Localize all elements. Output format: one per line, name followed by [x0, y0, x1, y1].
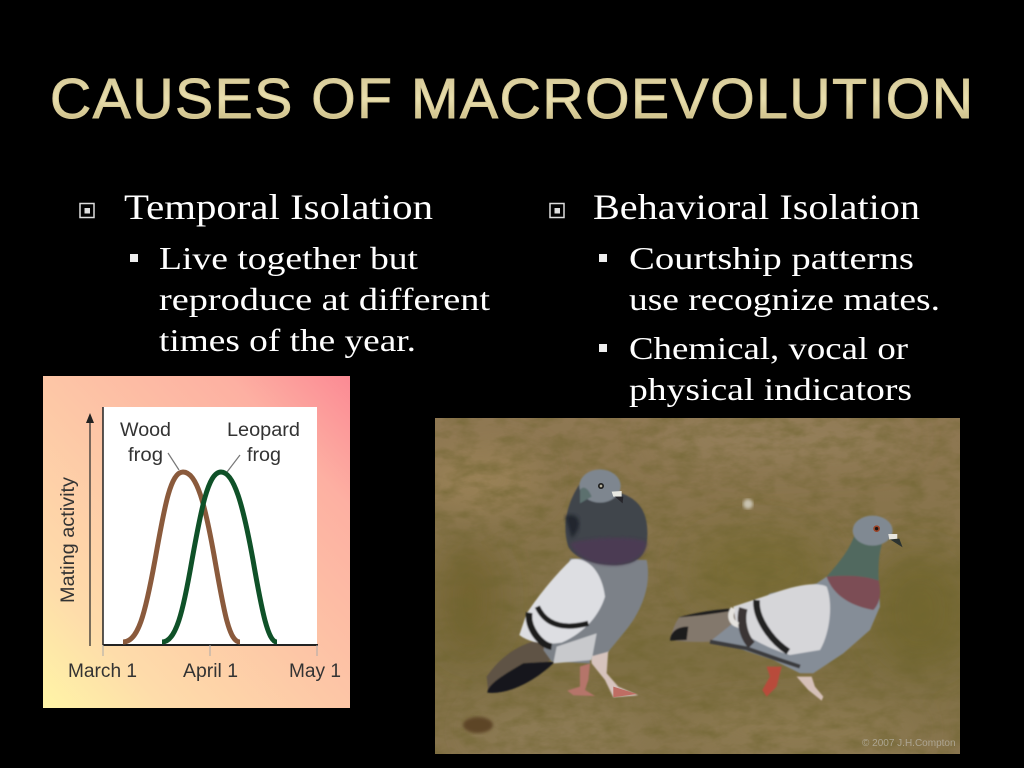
text: indicators: Chemical, vocal or	[629, 330, 908, 366]
text: live together: Live together but	[159, 240, 418, 276]
ground	[420, 418, 970, 754]
right pigeon	[670, 516, 903, 701]
left pigeon	[487, 469, 648, 697]
bullet: indicators	[599, 344, 607, 352]
x axis labels	[68, 661, 341, 682]
bullet: courtship	[599, 254, 607, 262]
y axis label: Mating activity	[58, 476, 79, 603]
acorn	[463, 717, 493, 733]
text: courtship: use recognize mates.	[629, 281, 940, 317]
text: indicators	[629, 330, 912, 407]
x axis labels: March 1	[68, 661, 137, 682]
small white pebble	[743, 499, 753, 509]
x axis	[103, 407, 318, 656]
photo: courting pigeons	[420, 418, 970, 754]
text: courtship: Courtship patterns	[629, 240, 914, 276]
text: courtship	[629, 240, 940, 317]
chart: frog mating activity	[43, 376, 350, 708]
bullet: behavioral isolation	[550, 204, 564, 218]
leopard frog label	[227, 420, 300, 472]
y axis arrow	[86, 413, 94, 646]
leopard frog label: Leopard	[227, 420, 300, 441]
text: live together: reproduce at different	[159, 281, 490, 317]
bullet: temporal isolation	[80, 204, 94, 218]
wood frog label: Wood	[120, 420, 171, 441]
text: live together: times of the year.	[159, 322, 416, 358]
panel: behavioral isolation text	[550, 187, 940, 407]
wood frog label: frog	[128, 445, 163, 466]
text: indicators: physical indicators	[629, 371, 912, 407]
heading: behavioral isolation: Behavioral Isolation	[593, 187, 920, 227]
x axis labels: May 1	[289, 661, 341, 682]
photo credit: © 2007 J.H.Compton	[862, 738, 956, 749]
text: live together	[159, 240, 490, 358]
bullet: live together	[130, 254, 138, 262]
title: CAUSES OF MACROEVOLUTION	[50, 67, 973, 131]
wood frog curve	[123, 472, 240, 642]
x axis labels: April 1	[183, 661, 238, 682]
leopard frog label: frog	[247, 445, 281, 466]
leopard frog curve	[162, 472, 277, 642]
panel: temporal isolation text	[80, 187, 490, 358]
wood frog label	[120, 420, 179, 470]
heading: temporal isolation: Temporal Isolation	[124, 187, 433, 227]
